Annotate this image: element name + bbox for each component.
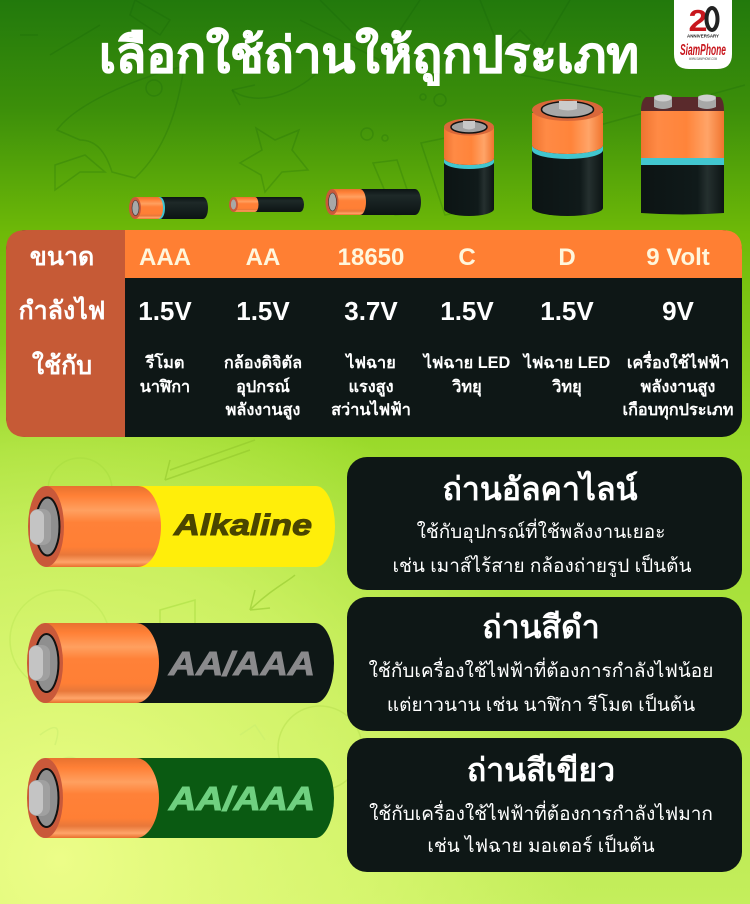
row: sizes [139,244,710,271]
panel: green battery description: ถ่านสีเขียว [467,752,615,788]
row: voltage: 1.5V [236,296,290,326]
battery: 18650 [326,189,421,215]
logo: SiamPhone 20th anniversary: WWW.SIAMPHONE.COM [689,57,717,61]
row: uses: ไฟฉาย LED [522,352,611,372]
row: voltage [138,296,695,326]
row: uses: สว่านไฟฟ้า [331,399,411,419]
battery: D [532,99,603,216]
row: uses: รีโมต [144,352,184,372]
row: voltage: 1.5V [540,296,594,326]
row: uses: อุปกรณ์ [236,377,290,397]
battery: alkaline: Alkaline [173,509,312,542]
row: uses: นาฬิกา [140,378,190,396]
row headings: ใช้กับ [32,350,92,380]
row headings: ขนาด [30,243,94,271]
row: uses [140,350,733,421]
battery: AAA [129,197,208,219]
row: voltage: 9V [662,296,695,326]
battery: green AA/AAA [27,758,334,838]
row: uses: ไฟฉาย LED [422,352,511,372]
row: uses: พลังงานสูง [226,401,300,421]
battery: black AA/AAA: AA/AAA [168,645,315,682]
battery: green AA/AAA: AA/AAA [168,780,315,817]
row: sizes: AAA [139,244,191,271]
row: voltage: 3.7V [344,296,398,326]
battery: 9 Volt [641,94,724,214]
battery: black AA/AAA [27,623,334,703]
battery: alkaline [28,486,335,567]
panel: alkaline description: เช่น เมาส์ไร้สาย กล้องถ่ายรูป เป็นต้น [393,553,691,577]
panel: black battery description [347,597,742,731]
panel: green battery description: ใช้กับเครื่องใช้ไฟฟ้าที่ต้องการกำลังไฟมาก [369,800,713,825]
row headings: กำลังไฟ [19,295,105,325]
row: sizes: 18650 [338,244,404,271]
background doodles: upper [20,0,745,215]
row: uses: กล้องดิจิตัล [224,354,302,372]
row: uses: เครื่องใช้ไฟฟ้า [627,350,729,372]
row: uses: ไฟฉาย [344,352,396,372]
logo: SiamPhone 20th anniversary [674,0,732,69]
panel: green battery description [347,738,742,872]
panel: black battery description: แต่ยาวนาน เช่น นาฬิกา รีโมต เป็นต้น [387,692,695,716]
panel: black battery description: ใช้กับเครื่องใช้ไฟฟ้าที่ต้องการกำลังไฟน้อย [369,657,713,682]
battery: C [444,118,494,216]
row: uses: วิทยุ [551,378,582,397]
row: voltage: 1.5V [138,296,192,326]
logo: SiamPhone 20th anniversary: ANNIVERSARY [687,34,719,38]
title: เลือกใช้ถ่านให้ถูกประเภท [99,27,639,86]
background doodles: lower [10,440,362,790]
row: voltage: 1.5V [440,296,494,326]
panel: alkaline description [347,457,742,590]
panel: alkaline description: ถ่านอัลคาไลน์ [442,470,638,507]
panel: black battery description: ถ่านสีดำ [482,609,600,645]
row: uses: วิทยุ [451,378,482,397]
row: uses: เกือบทุกประเภท [623,400,733,420]
row headings [19,243,105,380]
row: uses: พลังงานสูง [641,378,715,398]
panel: alkaline description: ใช้กับอุปกรณ์ที่ใช้พลังงานเยอะ [417,518,665,544]
row: sizes: C [458,244,476,271]
row: uses: แรงสูง [348,378,394,398]
row: sizes: 9 Volt [646,244,710,271]
row: sizes: D [558,244,576,271]
panel: green battery description: เช่น ไฟฉาย มอเตอร์ เป็นต้น [427,833,655,857]
panel: battery comparison table [6,230,742,437]
row: sizes: AA [246,244,280,271]
logo: SiamPhone 20th anniversary: 2 [688,3,708,38]
battery: AA [229,197,304,212]
